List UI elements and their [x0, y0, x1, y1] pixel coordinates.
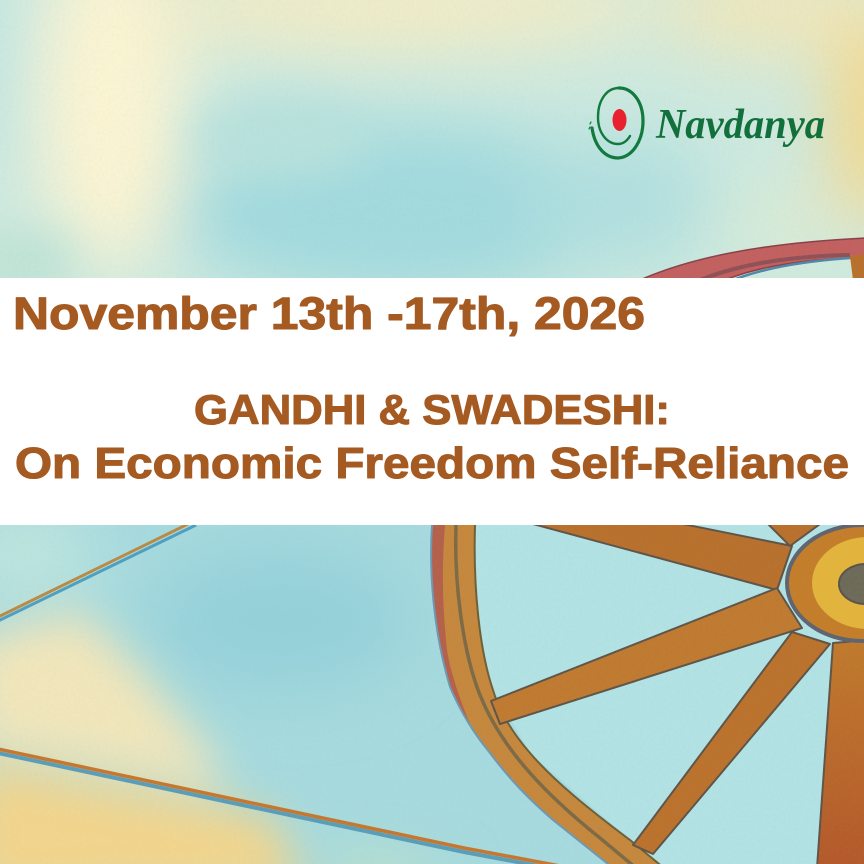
- white title band: [0, 278, 864, 525]
- logo red seed: [612, 109, 626, 131]
- wheel hub: [787, 525, 864, 641]
- title line 2: On Economic Freedom Self-Reliance: [15, 439, 849, 488]
- logo: Navdanya: [589, 88, 825, 158]
- diagonal string: lower: [0, 749, 560, 864]
- logo wordmark: Navdanya: [655, 102, 825, 148]
- date heading: November 13th -17th, 2026: [13, 288, 645, 339]
- diagonal string: upper left: [0, 524, 196, 621]
- wheel interior sky: [473, 525, 864, 864]
- wheel rim: top arc: [640, 238, 864, 280]
- painted background: bottom panel: [0, 520, 864, 864]
- logo spiral mark: [589, 88, 643, 158]
- title line 1: GANDHI & SWADESHI:: [194, 386, 670, 433]
- wheel spokes: [491, 524, 864, 864]
- painted background: top panel: [0, 0, 864, 300]
- spinning wheel: rim: [431, 525, 664, 864]
